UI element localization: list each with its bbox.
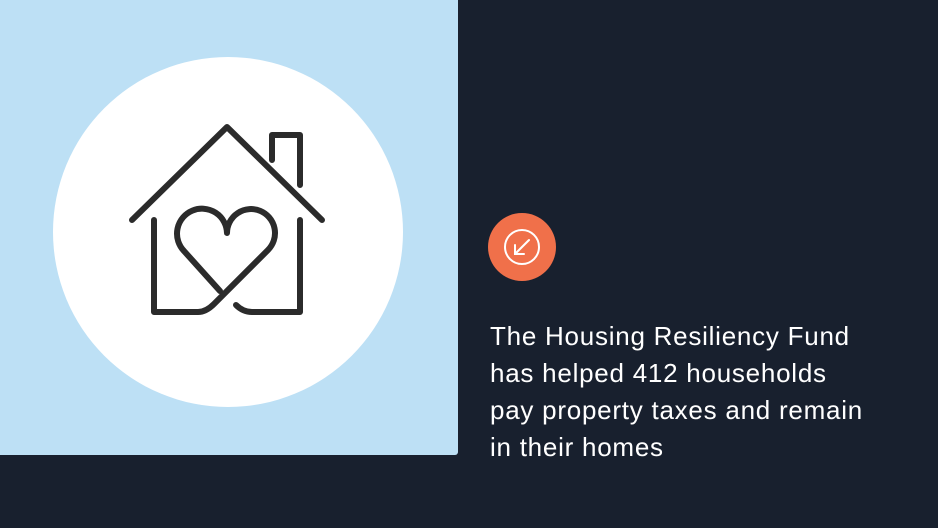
panel: illustration	[0, 0, 458, 455]
text block: statement: has helped 412 households	[490, 358, 827, 388]
text block: statement	[490, 321, 863, 462]
text block: statement: in their homes	[490, 432, 664, 462]
text block: statement: The Housing Resiliency Fund	[490, 321, 850, 351]
text block: statement: pay property taxes and remain	[490, 395, 863, 425]
icon: house with heart	[53, 57, 403, 407]
icon: orange arrow badge	[488, 213, 556, 281]
